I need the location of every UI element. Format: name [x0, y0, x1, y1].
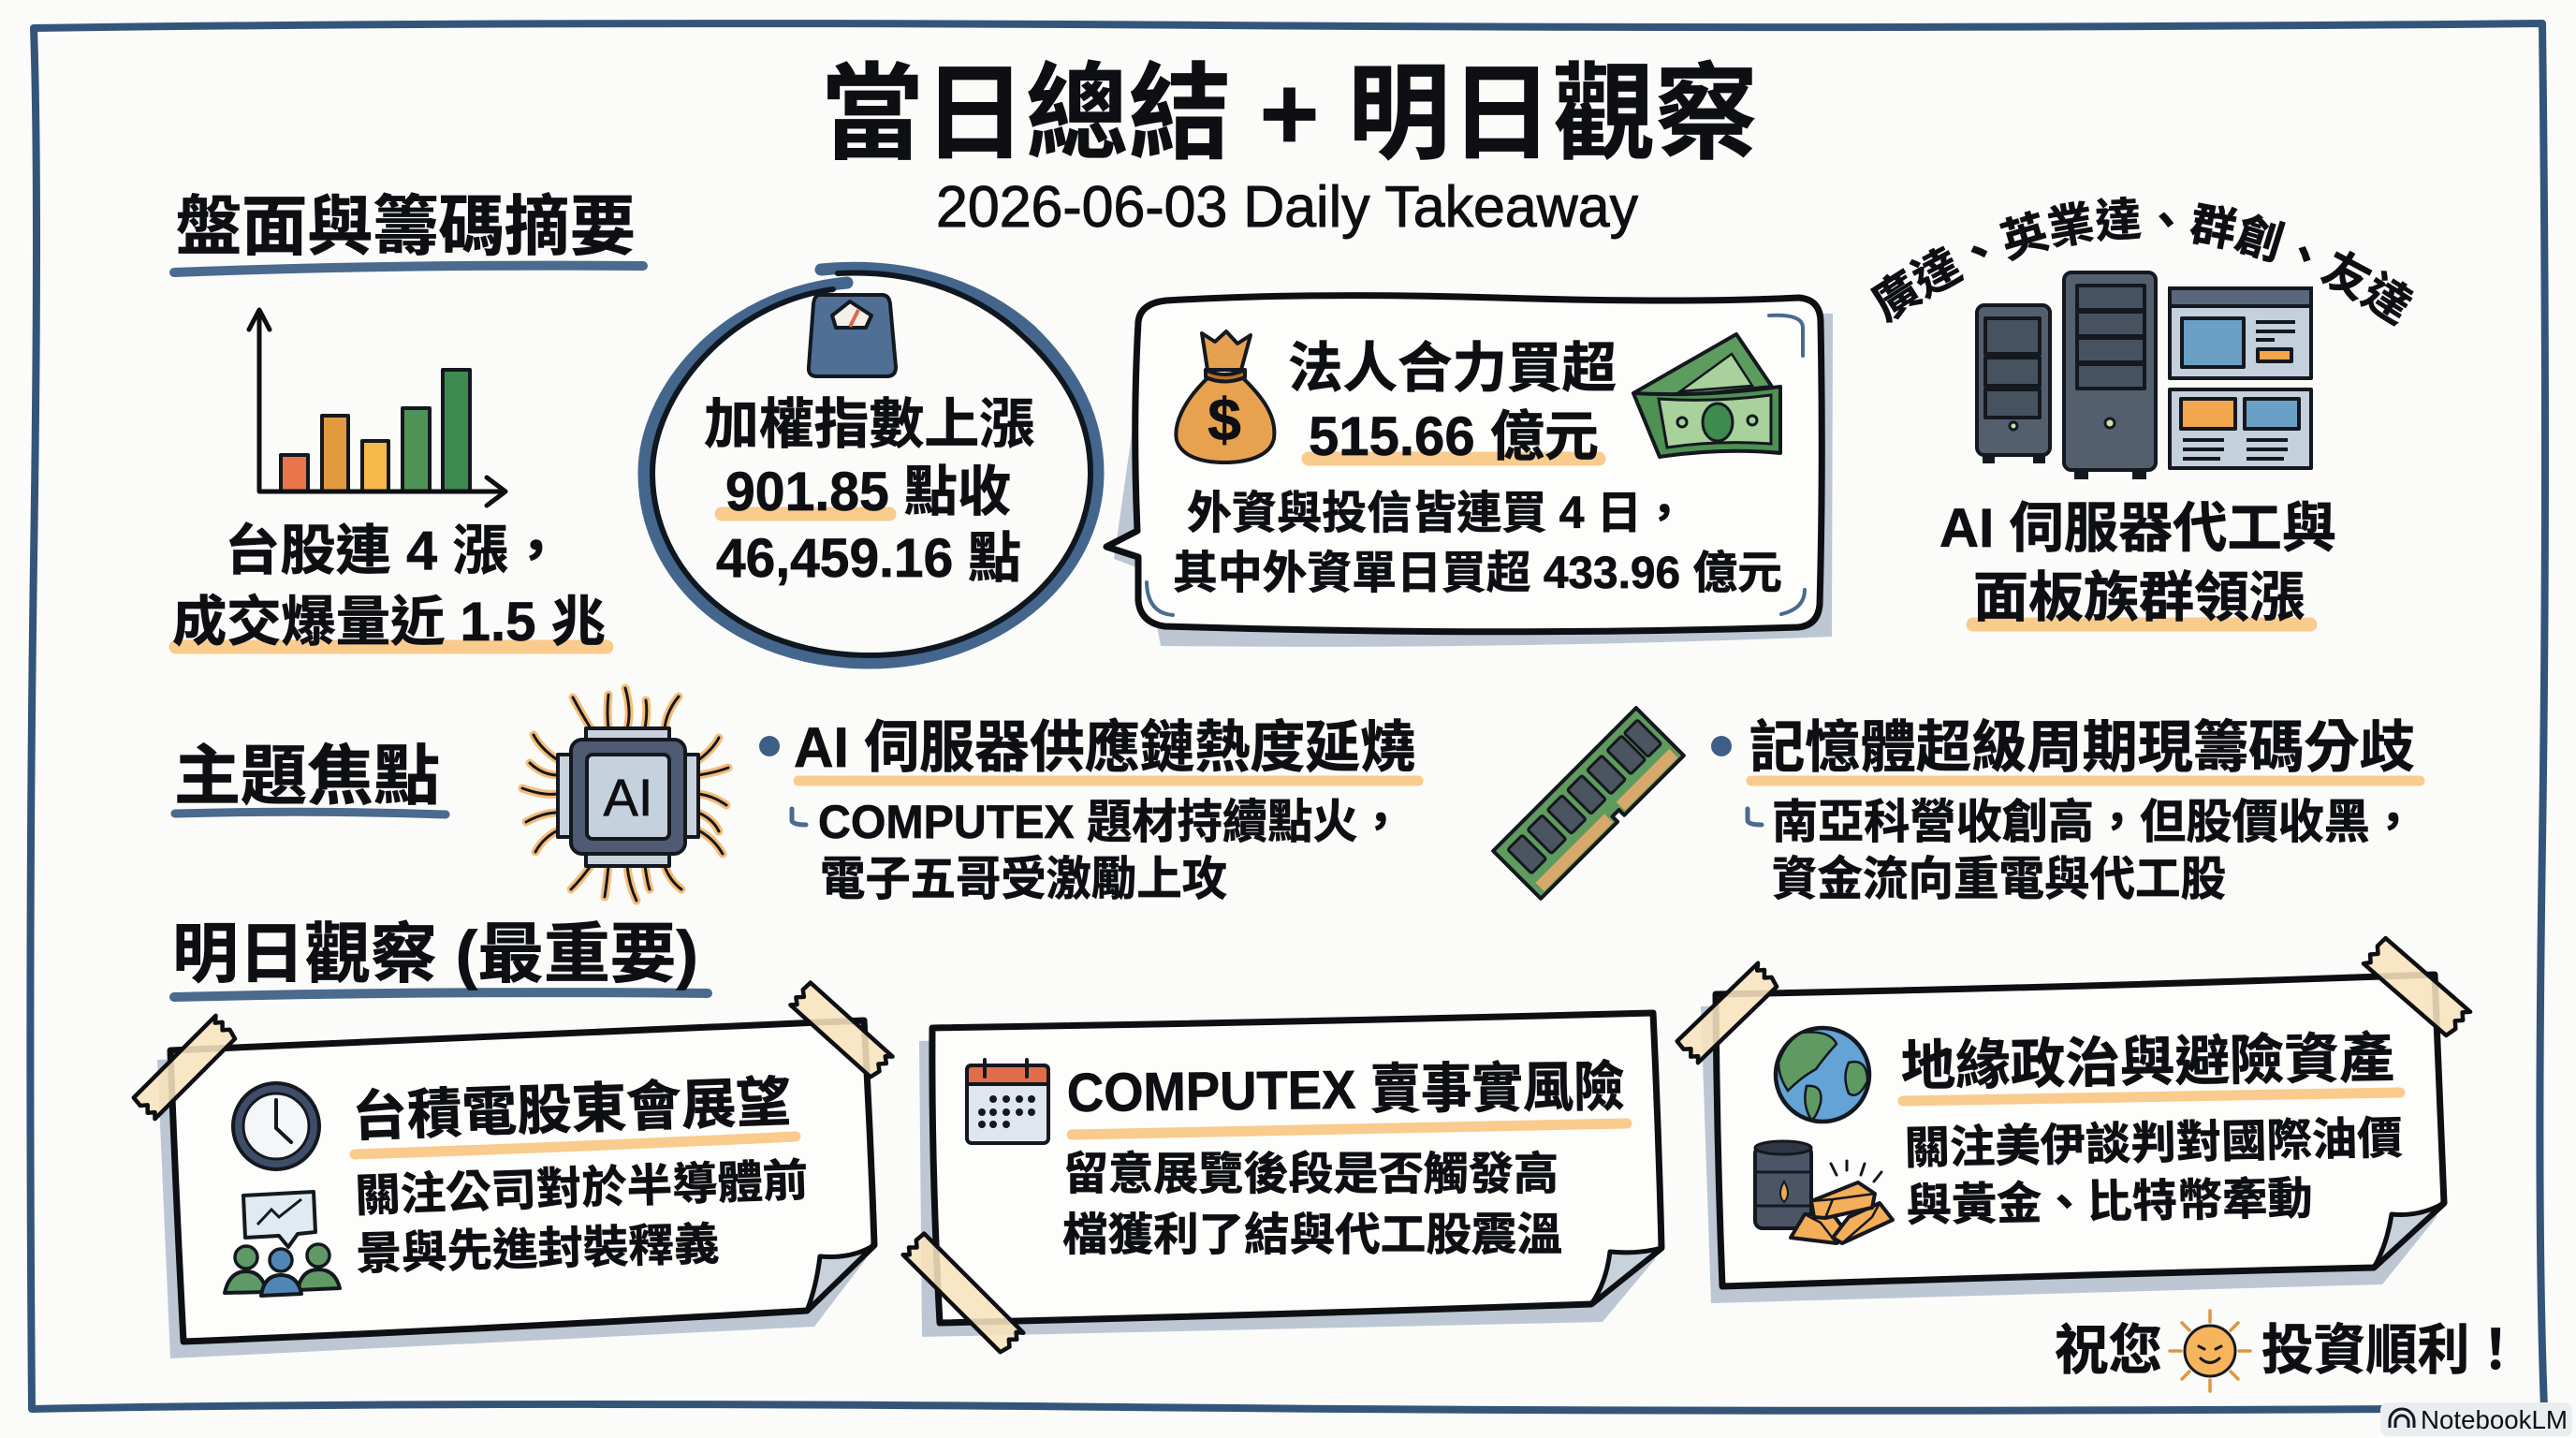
icon: clock — [233, 1083, 319, 1169]
note: TSMC shareholder meeting: 關注公司對於半導體前 — [355, 1156, 809, 1222]
heading: tomorrow watch: 明日觀察 (最重要) — [172, 917, 698, 990]
note: TSMC shareholder meeting: 景與先進封裝釋義 — [356, 1220, 720, 1280]
text: four day rally, record volume: 成交爆量近 1.5 兆 — [172, 592, 606, 653]
note: geopolitics and safe havens: 關注美伊談判對國際油價 — [1904, 1114, 2403, 1174]
bullet: memory supercycle: 資金流向重電與代工股 — [1772, 853, 2226, 905]
circle callout: weighted index: 加權指數上漲 — [704, 394, 1034, 455]
speech bubble: institutional buying: 法人合力買超 — [1288, 338, 1617, 399]
panel: AI server and display sector — [1870, 197, 2414, 631]
bar chart: rising volume — [249, 310, 505, 506]
icon: smiling sun — [2170, 1311, 2250, 1391]
panel: tomorrow watch — [133, 917, 2470, 1358]
note: TSMC shareholder meeting — [133, 982, 893, 1358]
speech bubble: institutional buying — [1106, 296, 1833, 647]
icon: meeting audience — [225, 1192, 340, 1296]
subtitle date: 2026-06-03 Daily Takeaway — [936, 175, 1638, 240]
circle callout: weighted index: 46,459.16 點 — [716, 528, 1021, 589]
bullet: AI server supply chain: AI 伺服器供應鏈熱度延燒 — [794, 716, 1415, 779]
note: COMPUTEX sell the fact risk: 檔獲利了結與代工股震溫 — [1062, 1211, 1562, 1260]
bullet: memory supercycle: 記憶體超級周期現籌碼分歧 — [1749, 716, 2415, 779]
note: geopolitics and safe havens: 與黃金、比特幣牽動 — [1906, 1174, 2313, 1231]
note: geopolitics and safe havens: 地緣政治與避險資產 — [1900, 1028, 2394, 1097]
tape — [2363, 937, 2470, 1037]
icon: oil barrel and gold bars — [1755, 1141, 1893, 1243]
text: AI server and panel makers lead: 面板族群領漲 — [1973, 567, 2305, 628]
bullet: memory supercycle — [1711, 716, 2420, 905]
tape — [790, 982, 893, 1078]
icon: banknotes — [1633, 334, 1780, 457]
note: COMPUTEX sell the fact risk: COMPUTEX 賣事實風險 — [1066, 1057, 1625, 1123]
arched company names: 廣達、英業達、群創、友達 — [1870, 197, 2414, 327]
icon: memory module — [1493, 708, 1684, 899]
speech bubble: institutional buying: 515.66 億元 — [1309, 406, 1599, 467]
speech bubble: institutional buying: 其中外資單日買超 433.96 億元 — [1173, 549, 1782, 598]
bullet: AI server supply chain: 電子五哥受激勵上攻 — [820, 853, 1227, 905]
bullet: memory supercycle: 南亞科營收創高，但股價收黑， — [1772, 796, 2416, 848]
icon: money bag: $ — [1208, 386, 1241, 453]
tape — [1676, 963, 1778, 1064]
bullet: AI server supply chain — [759, 716, 1418, 905]
panel: market and chips summary — [168, 190, 2414, 668]
icon: AI chip — [522, 688, 728, 901]
tape — [902, 1233, 1023, 1354]
speech bubble: institutional buying: 外資與投信皆連買 4 日， — [1187, 489, 1687, 538]
heading: market summary: 盤面與籌碼摘要 — [176, 190, 636, 263]
note: geopolitics and safe havens — [1676, 937, 2470, 1303]
closing message: 投資順利！ — [2261, 1320, 2522, 1381]
icon: scale — [809, 295, 896, 376]
circle callout: weighted index — [644, 268, 1098, 663]
heading: themes: 主題焦點 — [174, 740, 440, 813]
NotebookLM badge: NotebookLM — [2421, 1405, 2568, 1434]
icon: AI chip: AI — [604, 768, 652, 827]
tape — [133, 1016, 237, 1120]
panel: themes in focus — [174, 688, 2420, 905]
icon: servers and screens — [1977, 272, 2311, 479]
closing message — [2055, 1311, 2522, 1391]
NotebookLM badge — [2380, 1402, 2572, 1436]
text: four day rally, record volume: 台股連 4 漲， — [225, 521, 564, 581]
title: 當日總結 + 明日觀察 — [821, 55, 1758, 172]
note: COMPUTEX sell the fact risk — [902, 1013, 1661, 1354]
closing message: 祝您 — [2055, 1320, 2162, 1381]
text: four day rally, record volume — [172, 521, 607, 653]
bullet: AI server supply chain: COMPUTEX 題材持續點火， — [818, 796, 1403, 848]
note: TSMC shareholder meeting: 台積電股東會展望 — [351, 1072, 792, 1148]
text: AI server and panel makers lead: AI 伺服器代工與 — [1939, 498, 2336, 559]
note: COMPUTEX sell the fact risk: 留意展覽後段是否觸發高 — [1063, 1150, 1559, 1199]
icon: money bag — [1176, 331, 1274, 462]
icon: calendar — [967, 1060, 1048, 1143]
circle callout: weighted index: 901.85 點收 — [725, 462, 1011, 522]
text: AI server and panel makers lead — [1939, 498, 2336, 628]
icon: globe — [1776, 1028, 1869, 1122]
